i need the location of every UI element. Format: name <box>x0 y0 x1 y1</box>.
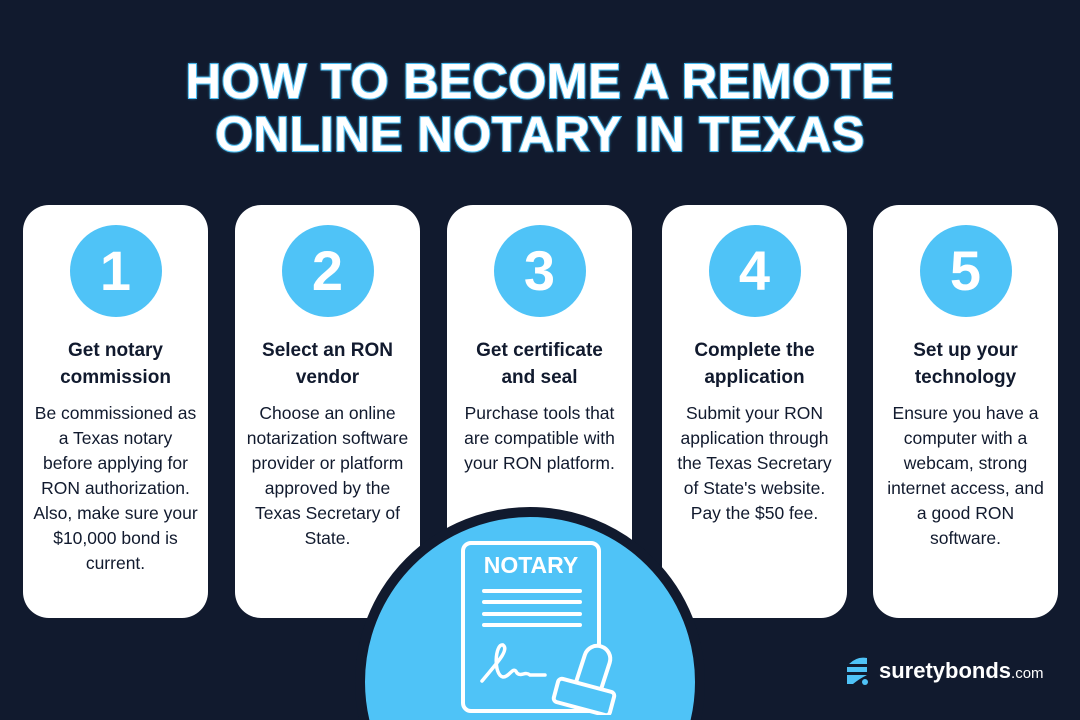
card 4: Complete the <box>694 340 815 361</box>
card 2: vendor <box>296 367 359 388</box>
title: ONLINE NOTARY IN TEXAS <box>215 108 865 162</box>
card 1: Get notary <box>68 340 163 361</box>
card 3 <box>447 205 632 618</box>
card 1: commission <box>60 367 171 388</box>
card 5: Ensure you have a computer with a webcam, strong internet access, and a good RON software. <box>887 403 1044 548</box>
card 1: Be commissioned as a Texas notary before applying for RON authorization. Also, make sure your $10,000 bond is current. <box>33 403 198 573</box>
card 3: Get certificate <box>476 340 603 361</box>
card 3: 3 <box>524 239 555 302</box>
card 5: Set up your <box>913 340 1018 361</box>
card 2: Choose an online notarization software provider or platform approved by the Texas Secretary of State. <box>247 403 408 548</box>
card 3: Purchase tools that are compatible with your RON platform. <box>464 403 615 473</box>
card 4: application <box>704 367 805 388</box>
card 1 <box>23 205 208 618</box>
card 4: 4 <box>739 239 770 302</box>
card 5 <box>873 205 1058 618</box>
title <box>186 55 894 162</box>
title: HOW TO BECOME A REMOTE <box>186 55 894 109</box>
card 4 <box>662 205 847 618</box>
card 4: Submit your RON application through the Texas Secretary of State's website. Pay the $50 fee. <box>677 403 832 523</box>
card 5: technology <box>915 367 1016 388</box>
logo: suretybonds.com <box>879 658 1044 683</box>
card 2: Select an RON <box>262 340 393 361</box>
icon: notary document with stamp <box>461 541 616 715</box>
card 1: 1 <box>100 239 131 302</box>
card 5: 5 <box>950 239 981 302</box>
card 2 <box>235 205 420 618</box>
notary circle <box>365 507 695 720</box>
icon: notary document with stamp: NOTARY <box>484 552 578 578</box>
card 3: and seal <box>501 367 578 388</box>
card 2: 2 <box>312 239 343 302</box>
